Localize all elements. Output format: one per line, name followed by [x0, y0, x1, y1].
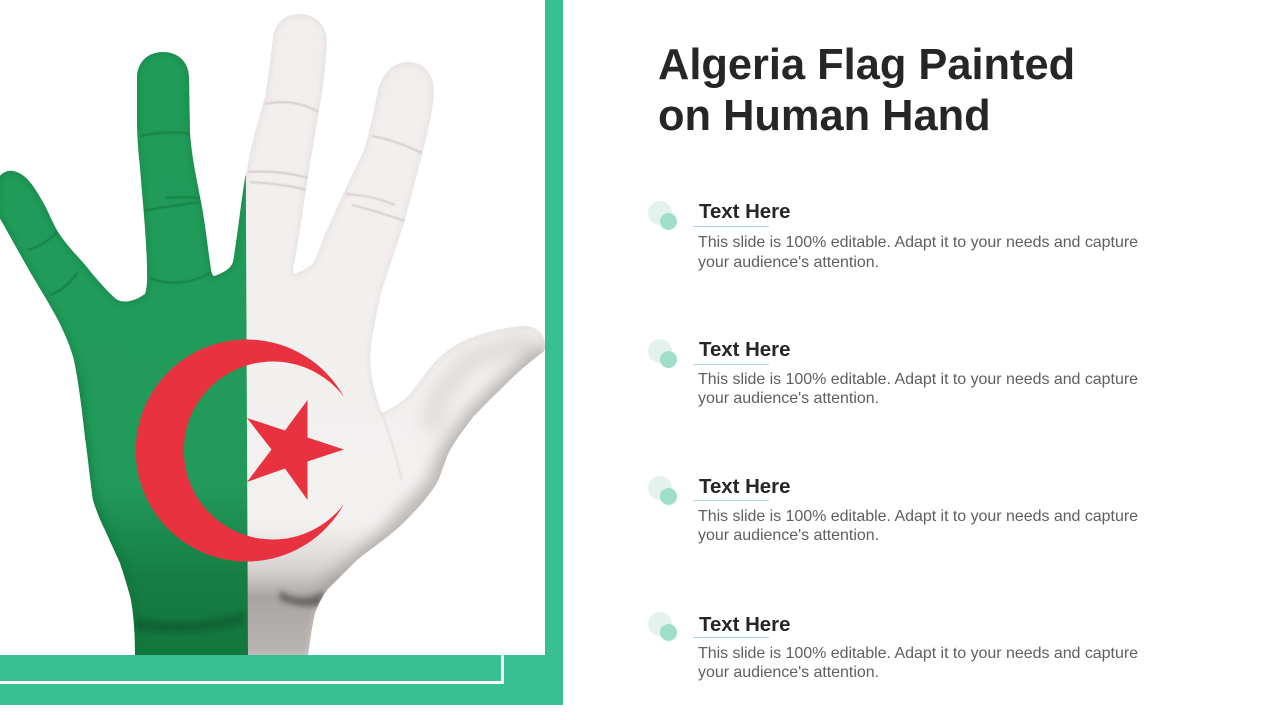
- list item 4: [648, 612, 1138, 681]
- finger and palm creases: [248, 102, 422, 480]
- heading 2: Text Here: [699, 339, 790, 361]
- heading 3: Text Here: [699, 476, 790, 498]
- heading 4: Text Here: [699, 614, 790, 636]
- body text 2: [698, 371, 1138, 407]
- title: Algeria Flag Painted: [658, 41, 1075, 89]
- white half of the hand: [246, 14, 545, 655]
- body text 4: This slide is 100% editable. Adapt it to your needs and capture: [698, 645, 1138, 662]
- icon: overlapping circles: [648, 339, 677, 368]
- list item 2: [648, 339, 1138, 407]
- frame: white inset line: [0, 655, 504, 684]
- frame: right teal bar: [545, 0, 563, 705]
- body text 3: your audience's attention.: [698, 527, 879, 544]
- body text 1: your audience's attention.: [698, 254, 879, 271]
- icon: overlapping circles: [648, 201, 677, 230]
- underline 2: [693, 364, 769, 365]
- body text 2: This slide is 100% editable. Adapt it to your needs and capture: [698, 371, 1138, 388]
- crescent: [136, 340, 344, 562]
- green finger creases: [28, 132, 212, 295]
- body text 4: your audience's attention.: [698, 664, 879, 681]
- frame: bottom teal bar: [0, 655, 563, 705]
- green half of the hand: [0, 52, 248, 655]
- list item 3: [648, 476, 1138, 544]
- title: [658, 41, 1075, 140]
- underline 3: [693, 500, 769, 501]
- body text 1: [698, 234, 1138, 271]
- hand illustration painted with the Algerian flag: [0, 14, 545, 655]
- underline 4: [693, 637, 769, 638]
- body text 3: This slide is 100% editable. Adapt it to your needs and capture: [698, 508, 1138, 525]
- icon: overlapping circles: [648, 612, 677, 641]
- icon: overlapping circles: [648, 476, 677, 505]
- title: on Human Hand: [658, 92, 991, 140]
- body text 1: This slide is 100% editable. Adapt it to your needs and capture: [698, 234, 1138, 251]
- list item 1: [648, 201, 1138, 271]
- underline 1: [693, 226, 769, 227]
- body text 3: [698, 508, 1138, 544]
- star: [247, 400, 344, 500]
- heading 1: Text Here: [699, 201, 790, 223]
- body text 2: your audience's attention.: [698, 390, 879, 407]
- body text 4: [698, 645, 1138, 681]
